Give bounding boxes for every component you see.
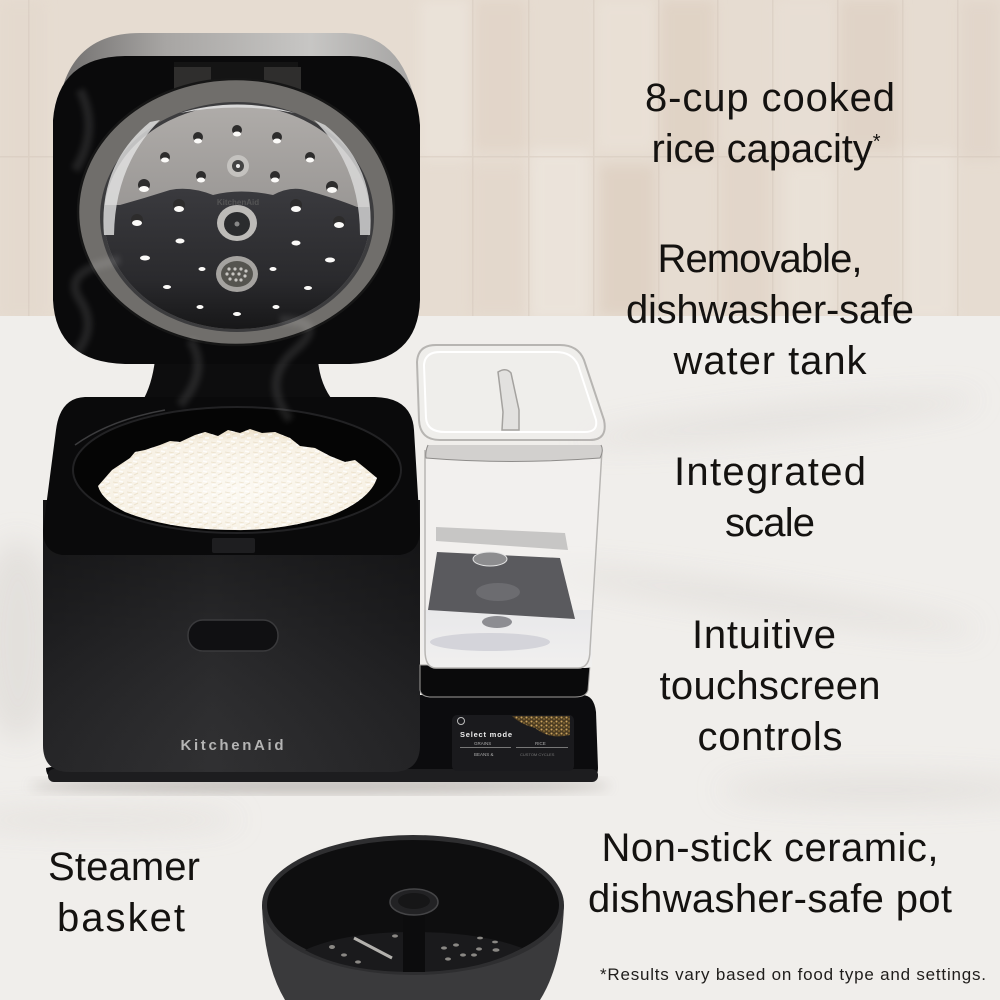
lid black face <box>53 56 420 364</box>
body top rim with opening <box>43 397 420 555</box>
basket holes <box>329 934 500 964</box>
water <box>423 527 592 668</box>
feature label: steamer basket <box>48 845 200 940</box>
feature label: capacity: * <box>873 131 881 153</box>
rim and interior <box>262 835 564 975</box>
feature label: touchscreen <box>660 613 880 759</box>
removable water tank <box>417 345 605 697</box>
feature label: touchscreen: controls <box>698 715 842 759</box>
tank lid <box>417 345 605 440</box>
feature label: capacity: 8-cup cooked <box>645 76 895 120</box>
steel inner lid <box>100 102 374 332</box>
brand emboss: KitchenAid <box>217 198 259 207</box>
main body <box>43 500 420 772</box>
cooked rice <box>98 429 377 530</box>
feature label: pot: Non-stick ceramic, <box>602 826 938 870</box>
steam holes <box>131 125 345 228</box>
hinge neck <box>142 360 334 402</box>
feature label: touchscreen: touchscreen <box>660 664 880 708</box>
feature label: steamer basket: Steamer <box>48 845 200 889</box>
base tray with scale <box>46 695 598 782</box>
basket slot <box>354 938 392 958</box>
bright reflections <box>103 120 160 235</box>
feature label: pot: dishwasher-safe pot <box>588 877 952 921</box>
feature label: capacity: rice capacity <box>652 127 873 171</box>
grain image <box>512 716 570 736</box>
outer wall <box>262 905 564 1000</box>
steam wisps <box>70 90 309 420</box>
hinge latches <box>174 62 298 88</box>
tank foot on tray <box>420 665 590 697</box>
feature label: water tank <box>626 237 914 383</box>
feature label: scale: scale <box>725 501 815 545</box>
steamer basket <box>262 835 564 1000</box>
tank handle <box>498 370 519 430</box>
feature label: water tank: water tank <box>672 339 868 383</box>
feature label: touchscreen: Intuitive <box>692 613 836 657</box>
centre stem <box>403 906 425 972</box>
touchscreen: RICE <box>535 741 546 746</box>
feature label: capacity <box>645 76 895 171</box>
touchscreen: GRAINS <box>474 741 491 746</box>
touchscreen: CUSTOM CYCLES <box>520 752 555 757</box>
brand logo: KitchenAid <box>180 737 284 754</box>
open lid <box>53 33 420 364</box>
touchscreen: BEANS & <box>474 752 494 757</box>
front button <box>188 620 278 651</box>
background: tiled wall <box>0 0 1000 320</box>
feature label: scale <box>674 450 866 545</box>
valve: small top <box>227 155 249 177</box>
background: marble counter <box>0 316 1000 1000</box>
feature label: steamer basket: basket <box>57 896 185 940</box>
tank walls <box>423 450 603 668</box>
rice cooker appliance <box>30 33 610 794</box>
footnote: *Results vary based on food type and settings. <box>600 965 986 984</box>
valve: centre <box>217 205 257 241</box>
feature label: pot <box>588 826 952 921</box>
touchscreen: Select mode <box>460 730 512 739</box>
feature label: scale: Integrated <box>674 450 866 494</box>
front latch <box>212 538 255 553</box>
feature label: water tank: Removable, <box>658 237 862 281</box>
touchscreen <box>452 715 574 771</box>
gasket ring <box>78 79 394 345</box>
lid silver rim <box>55 33 420 150</box>
shadow under appliance <box>30 778 610 794</box>
tank outline <box>425 450 602 668</box>
feature label: water tank: dishwasher-safe <box>626 288 914 332</box>
valve: mesh filter <box>216 256 258 292</box>
